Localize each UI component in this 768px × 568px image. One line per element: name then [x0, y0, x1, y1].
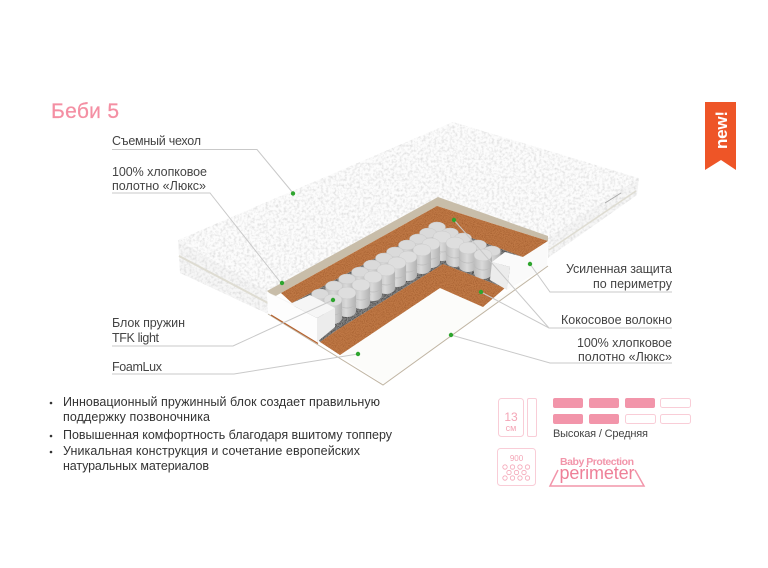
right callout labels: по периметру	[593, 277, 673, 291]
icon: 900 springs: 900	[510, 454, 524, 463]
feature list	[50, 395, 393, 473]
new ribbon	[705, 102, 736, 170]
icon: height 13 cm	[498, 398, 536, 436]
firmness caption: Высокая / Средняя	[553, 428, 648, 440]
left foam block	[267, 292, 335, 342]
feature list: Повышенная комфортность благодаря вшитому топперу	[63, 428, 393, 442]
left callout labels: Съемный чехол	[112, 134, 201, 148]
feature list: Инновационный пружинный блок создает правильную	[63, 395, 380, 409]
spring block	[312, 222, 500, 324]
mattress right side face	[548, 178, 639, 258]
green marker dots	[280, 191, 532, 356]
right callout labels: Усиленная защита	[566, 262, 672, 276]
upper coconut layer	[281, 206, 548, 303]
tan top layer	[267, 197, 548, 297]
title: Беби 5	[51, 100, 119, 123]
right callout labels: Кокосовое волокно	[561, 313, 672, 327]
left callout labels: полотно «Люкс»	[112, 179, 206, 193]
lower coconut layer	[320, 264, 505, 355]
feature list: Уникальная конструкция и сочетание европейских	[63, 444, 361, 458]
icon: 900 springs	[498, 448, 536, 486]
leader lines	[112, 150, 672, 374]
firmness bars	[553, 398, 690, 424]
bottom edge	[268, 266, 548, 385]
left callout labels: Блок пружин	[112, 316, 185, 330]
bottom white layer	[340, 267, 547, 384]
right callout labels: 100% хлопковое	[577, 336, 672, 350]
right callout labels: полотно «Люкс»	[578, 350, 672, 364]
mattress label tag	[605, 193, 621, 203]
logo: baby protection perimeter: perimeter	[560, 463, 634, 483]
spring floor	[292, 225, 523, 342]
icon: height 13 cm: 13	[504, 410, 518, 424]
right foam block	[490, 241, 548, 290]
logo: baby protection perimeter	[550, 456, 644, 486]
left callout labels	[112, 134, 207, 374]
left callout labels: FoamLux	[112, 360, 163, 374]
logo: baby protection perimeter: Baby Protection	[560, 456, 634, 468]
mattress left side face	[178, 240, 268, 314]
right callout labels	[561, 262, 673, 364]
mattress illustration	[178, 122, 639, 385]
feature list: натуральных материалов	[63, 459, 209, 473]
left callout labels: TFK light	[112, 331, 160, 345]
left callout labels: 100% хлопковое	[112, 165, 207, 179]
mattress cover top face	[178, 122, 639, 291]
icon: height 13 cm: см	[506, 423, 516, 433]
new ribbon: new!	[712, 111, 731, 149]
feature list: поддержку позвоночника	[63, 410, 210, 424]
